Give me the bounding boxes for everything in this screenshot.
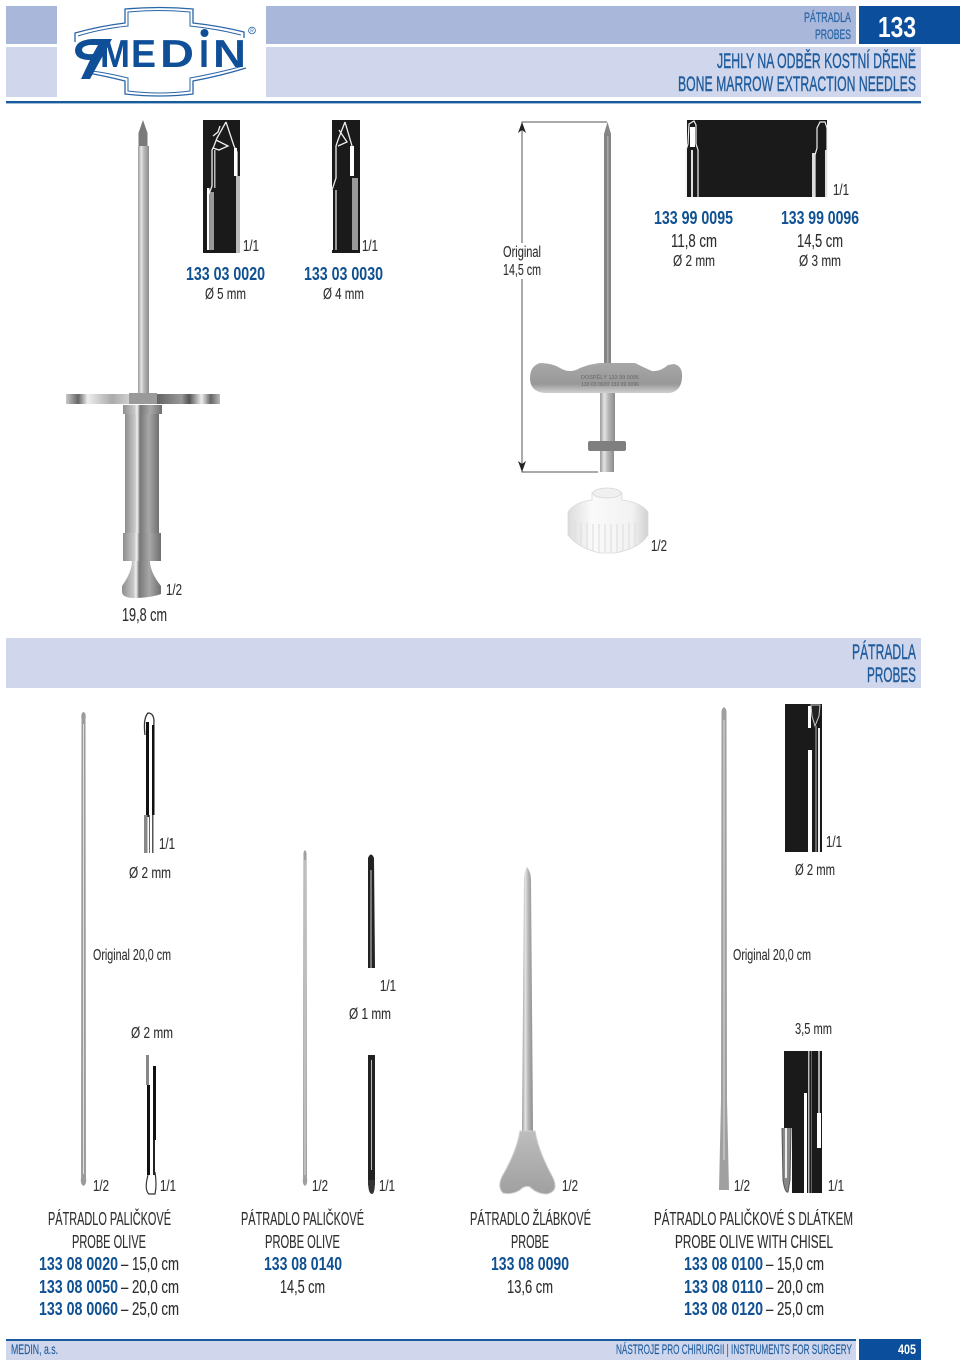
detail: olive tip top 4 xyxy=(785,704,823,852)
detail: chisel tip xyxy=(780,1051,822,1193)
text block: probe olive with chisel: – 20,0 cm xyxy=(766,1277,824,1297)
scale labels row: 1/2 xyxy=(93,1178,109,1195)
text block: probe olive with chisel: 133 08 0120 xyxy=(684,1298,763,1319)
label: 133 03 0030 xyxy=(304,263,383,303)
detail: tips 133 99 0095 and 0096 xyxy=(686,120,827,197)
text block: probe olive 2 xyxy=(241,1208,364,1297)
scale labels row: 1/2 xyxy=(734,1178,750,1195)
label: 133 99 0095: Ø 2 mm xyxy=(673,253,715,270)
text block: probe olive with chisel: PÁTRADLO PALIČKOVÉ S DLÁTKEM xyxy=(654,1208,853,1229)
logo: MEDIN: N xyxy=(213,33,246,76)
chapter number box xyxy=(859,6,960,44)
width: 3,5 mm xyxy=(795,1021,832,1038)
text block: probe olive with chisel: 133 08 0100 xyxy=(684,1253,763,1274)
instrument: T-handle needle: DOSPĚLÝ 133 99 0095 xyxy=(581,373,639,381)
detail: olive tip top 1 xyxy=(144,713,154,853)
section heading: probes: PÁTRADLA xyxy=(852,641,916,664)
scale 1/1: 1/1 xyxy=(159,836,175,853)
scale labels row: 1/2 xyxy=(562,1178,578,1195)
text block: probe olive 1: – 25,0 cm xyxy=(121,1299,179,1319)
label: 133 99 0095: 11,8 cm xyxy=(671,231,717,251)
text block: probe olive 1 xyxy=(39,1208,179,1319)
text block: probe olive with chisel: – 25,0 cm xyxy=(766,1299,824,1319)
label: 133 99 0095: 133 99 0095 xyxy=(654,207,733,228)
detail: needle tip 133 03 0020 xyxy=(203,120,240,253)
text block: grooved probe: 13,6 cm xyxy=(507,1277,553,1297)
probe 4: olive probe with chisel xyxy=(719,707,729,1190)
diameter: Ø 2 mm xyxy=(131,1025,173,1042)
section heading: probes: PROBES xyxy=(867,664,916,687)
scale 1/1: 1/1 xyxy=(833,182,849,199)
footer band: MEDIN, a.s. xyxy=(11,1341,58,1357)
section tab: probes xyxy=(804,10,851,42)
scale 1/1: 1/1 xyxy=(380,978,396,995)
label: 133 99 0096: Ø 3 mm xyxy=(799,253,841,270)
text block: probe olive 1: 133 08 0060 xyxy=(39,1298,118,1319)
text block: probe olive 2: PROBE OLIVE xyxy=(265,1232,340,1252)
text block: probe olive 1: – 20,0 cm xyxy=(121,1277,179,1297)
diameter: Ø 2 mm xyxy=(795,862,835,879)
detail: olive tip top 2 xyxy=(368,854,375,968)
label: 133 03 0020: Ø 5 mm xyxy=(205,286,246,303)
label: original length xyxy=(500,243,544,279)
section tab: probes: PROBES xyxy=(815,27,851,42)
text block: probe olive 2: PÁTRADLO PALIČKOVÉ xyxy=(241,1208,364,1229)
text block: grooved probe: 133 08 0090 xyxy=(491,1253,569,1274)
instrument: T-handle needle: 133 03 0020 133 99 0096 xyxy=(581,382,639,388)
text block: probe olive 1: PÁTRADLO PALIČKOVÉ xyxy=(48,1208,171,1229)
text block: probe olive 1: – 15,0 cm xyxy=(121,1254,179,1274)
probe 2: olive probe xyxy=(303,850,307,1186)
label: 133 03 0030: Ø 4 mm xyxy=(323,286,364,303)
label: 133 03 0030: 133 03 0030 xyxy=(304,263,383,284)
logo: MEDIN: I xyxy=(199,33,209,76)
text block: probe olive with chisel: PROBE OLIVE WITH CHISEL xyxy=(675,1232,833,1252)
scale labels row xyxy=(93,1178,844,1195)
label: 133 99 0096: 14,5 cm xyxy=(797,231,843,251)
section tab: probes: PÁTRADLA xyxy=(804,10,851,25)
logo: MEDIN xyxy=(75,8,255,96)
section heading: probes xyxy=(6,638,921,688)
scale 1/1: 1/1 xyxy=(243,238,259,255)
icon: white plastic knob xyxy=(568,488,648,553)
text block: grooved probe xyxy=(470,1209,591,1297)
text block: probe olive with chisel xyxy=(654,1208,853,1319)
text block: grooved probe: PROBE xyxy=(511,1232,549,1252)
label: original length: Original 20,0 cm xyxy=(93,947,171,964)
instrument: large bone marrow needle xyxy=(66,120,220,598)
scale labels row: 1/2 xyxy=(312,1178,328,1195)
scale labels row: 1/1 xyxy=(828,1178,844,1195)
page number box: 405 xyxy=(898,1341,916,1357)
detail: olive tip bottom 2 xyxy=(368,1055,375,1194)
label: 133 03 0020: 133 03 0020 xyxy=(186,263,265,284)
chapter number box: 133 xyxy=(878,12,916,44)
label: 133 03 0020 xyxy=(186,263,265,303)
label: 133 99 0096: 133 99 0096 xyxy=(781,207,859,228)
label: original length: Original 20,0 cm xyxy=(733,947,811,964)
probe 3: grooved probe xyxy=(500,867,555,1194)
logo: MEDIN: D xyxy=(160,33,194,76)
label: original length: Original xyxy=(503,244,541,261)
text block: probe olive with chisel: – 15,0 cm xyxy=(766,1254,824,1274)
text block: probe olive 1: 133 08 0020 xyxy=(39,1253,118,1274)
scale labels row: 1/1 xyxy=(379,1178,395,1195)
page number box xyxy=(859,1339,921,1360)
scale 1/1: 1/1 xyxy=(362,238,378,255)
scale 1/2: 1/2 xyxy=(651,538,667,555)
label: 133 99 0095 xyxy=(654,207,733,270)
title xyxy=(678,50,916,96)
text block: probe olive 1: PROBE OLIVE xyxy=(72,1232,146,1252)
detail: olive tip bottom 1 xyxy=(146,1055,156,1194)
text block: probe olive 1: 133 08 0050 xyxy=(39,1276,118,1297)
text block: probe olive 2: 133 08 0140 xyxy=(264,1253,342,1274)
scale labels row: 1/1 xyxy=(160,1178,176,1195)
instrument: T-handle needle xyxy=(530,122,682,472)
label: 133 99 0096 xyxy=(781,207,859,270)
scale 1/1: 1/1 xyxy=(826,834,842,851)
header band xyxy=(6,6,921,103)
length: 19,8 cm: 19,8 cm xyxy=(122,605,167,625)
footer band xyxy=(6,1339,856,1360)
logo: MEDIN: M xyxy=(100,33,130,76)
text block: grooved probe: PÁTRADLO ŽLÁBKOVÉ xyxy=(470,1209,591,1229)
probe 1: olive probe xyxy=(81,712,86,1186)
label: original length: 14,5 cm xyxy=(503,262,541,279)
diameter: Ø 1 mm xyxy=(349,1006,391,1023)
text block: probe olive 2: 14,5 cm xyxy=(280,1277,325,1297)
text block: probe olive with chisel: 133 08 0110 xyxy=(684,1276,763,1297)
logo: MEDIN: E xyxy=(131,33,156,76)
diameter: Ø 2 mm xyxy=(129,865,171,882)
logo: MEDIN: R xyxy=(250,28,254,34)
length arrow: original 14,5 cm xyxy=(518,122,607,472)
scale 1/2: 1/2 xyxy=(166,582,182,599)
detail: needle tip 133 03 0030 xyxy=(330,120,360,253)
